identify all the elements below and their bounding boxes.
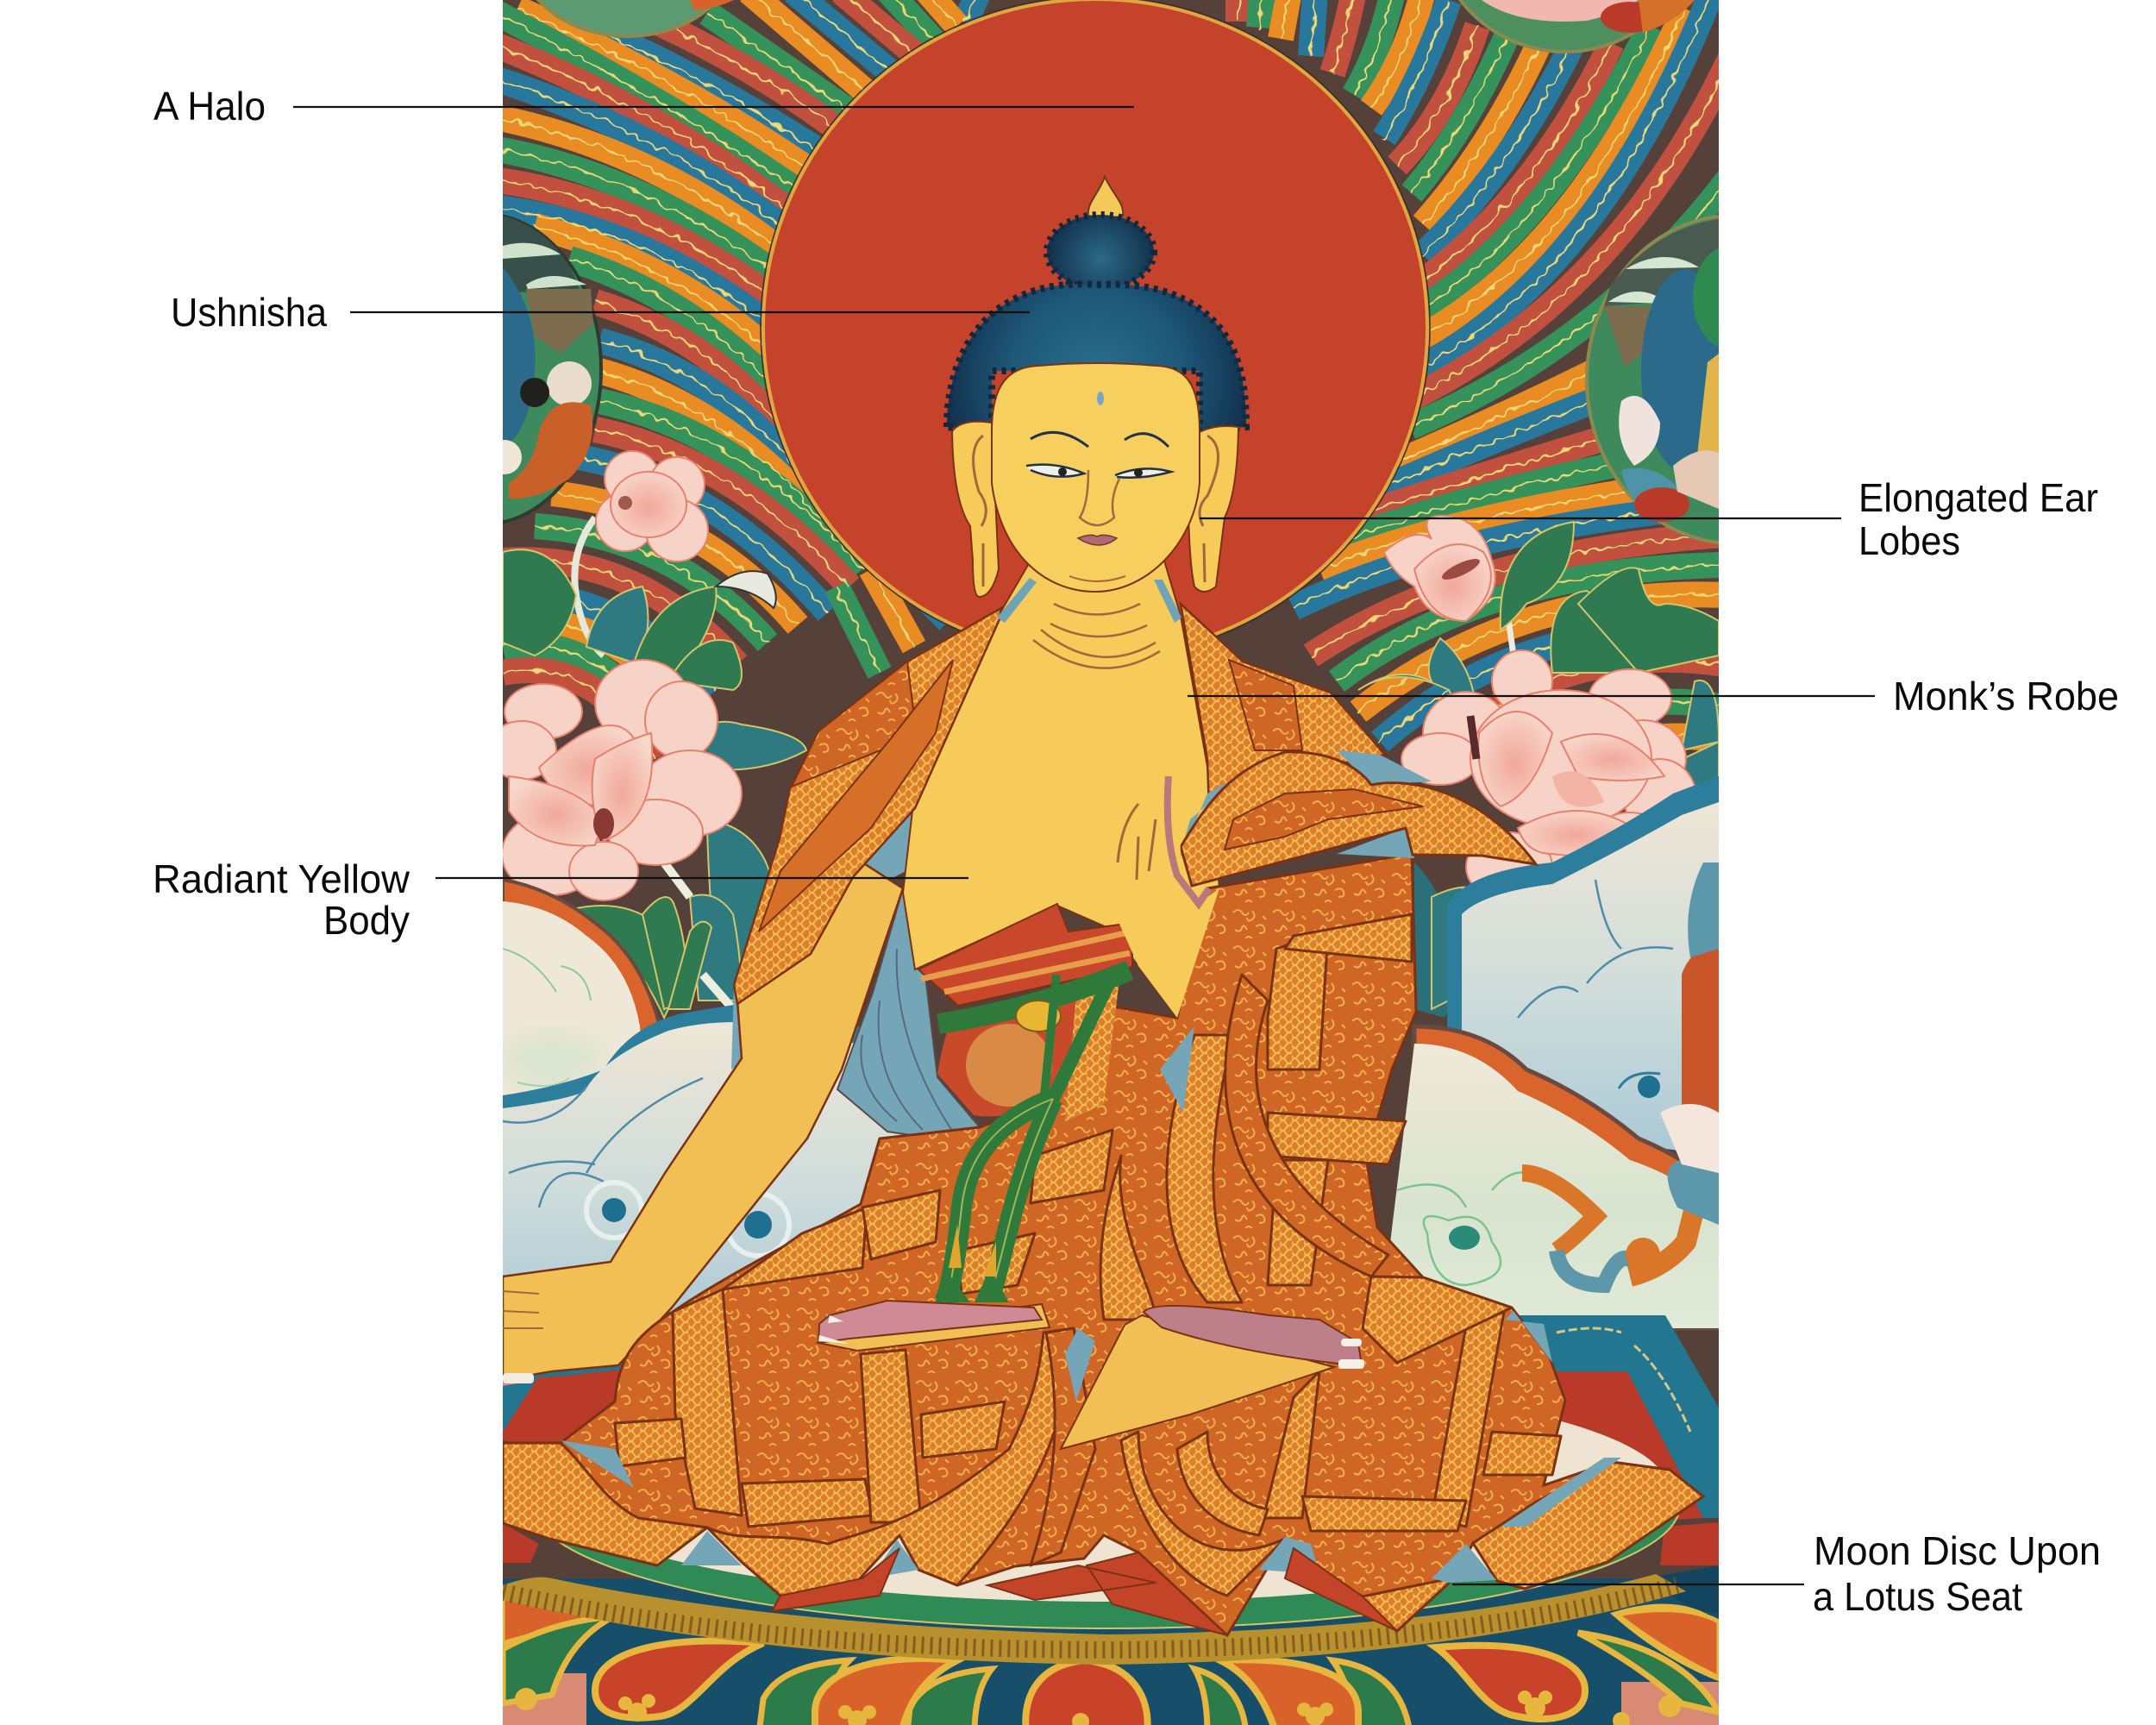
medallion: right scene [1585,214,1719,545]
cloud: lower left blue-edged [503,1005,906,1328]
label text: Elongated Ear [1858,475,2098,520]
nose [1080,470,1119,525]
gold textured band [503,1574,1686,1665]
leader line [1452,1584,1804,1585]
green sash and knot [938,970,1130,1024]
left shoulder robe [734,608,1001,1004]
urna [1097,392,1104,405]
label text: Radiant Yellow [153,856,411,901]
seat: teal and red carpet [503,1311,1719,1565]
label text: Lobes [1858,518,1960,563]
label text: Body [323,898,410,943]
flame jewel atop ushnisha [1088,177,1123,218]
blue lining at forearm [1178,750,1432,862]
cloud: right lower orange-edged [1380,1026,1719,1328]
pale blossom at right edge [1656,867,1719,932]
medallion: top right [1434,0,1696,52]
base ground [503,1578,1719,1725]
red and orange petals [595,1640,763,1718]
lotus seat green rim [558,1515,1679,1629]
callout: Moon Disc Upon a Lotus Seat [1452,1528,2101,1619]
cloud: upper left cream [503,879,660,1095]
robe mesh panels: centre and right column [1167,1035,1242,1302]
blue under robe at left shoulder and sash [837,888,980,1143]
label text: a Lotus Seat [1813,1574,2022,1619]
leaves: upper left [503,549,806,769]
left arm [503,862,903,1380]
belt folds [918,904,1132,1006]
white fingernail [503,1373,534,1383]
neck creases [1033,604,1160,668]
flower: small peony upper left with stem [574,451,708,656]
gold scroll ornaments [515,1688,1681,1725]
leader line [1200,518,1841,519]
right shoulder robe [1181,604,1385,811]
medallion: top left [517,0,738,36]
rainbow ray bands [503,0,1719,761]
hanging green ties [944,1099,1053,1302]
ear: right [1188,426,1238,592]
flower: bud upper right [1384,516,1514,656]
robe mesh panels: left lap [673,1289,742,1515]
ribbon ornament right [1522,1156,1719,1285]
moon disc [546,1374,1667,1602]
leader line [1188,695,1875,697]
mouth [1078,535,1117,545]
painting: thangka of the Buddha [503,0,1719,1725]
medallion: left scene with monk [503,214,603,524]
label text: Moon Disc Upon [1814,1528,2101,1573]
eyebrows [1031,432,1169,447]
halo [761,0,1430,659]
left foot [818,1301,1050,1351]
hair [947,284,1246,431]
flower: large peony right [1401,649,1695,883]
blue folds by the lotus seat [561,1440,1621,1583]
right shin and foot [1061,1306,1364,1449]
callout: Elongated Ear Lobes [1200,475,2098,563]
lotus base [503,1565,1719,1725]
cloud: right upper blue-edged [1447,776,1719,1156]
red hem tips at the seat [772,1548,1397,1635]
callout: Radiant Yellow Body [153,856,968,943]
green petals [503,1616,614,1703]
chin crease [1069,576,1125,581]
attendant robe at right edge [1660,862,1719,1173]
leader line [293,106,1134,108]
leaves: lower right [1414,862,1466,1018]
blue collar strips [997,578,1181,623]
belly undergarment [937,988,1108,1116]
eyes [1026,465,1171,478]
ushnisha bun [1047,215,1154,289]
robe mesh panels: right lap [1432,1302,1505,1527]
leaves: upper right [1358,522,1719,811]
label text: Monk’s Robe [1893,674,2119,718]
leader line [350,311,1030,313]
outer right navy and orange [1654,1565,1719,1613]
label text: Ushnisha [171,290,327,335]
label text: A Halo [154,84,266,129]
raised hand [1115,774,1219,1018]
flower: large peony left [487,660,742,900]
ear: left [952,422,999,597]
painting background [503,0,1719,1725]
figure of the Buddha [503,177,1703,1635]
face [992,363,1200,592]
robe drape over forearm [1181,752,1536,886]
leader line [436,877,968,879]
leaves: lower left [569,819,772,1018]
torso [903,561,1219,1018]
main robe [503,854,1703,1635]
